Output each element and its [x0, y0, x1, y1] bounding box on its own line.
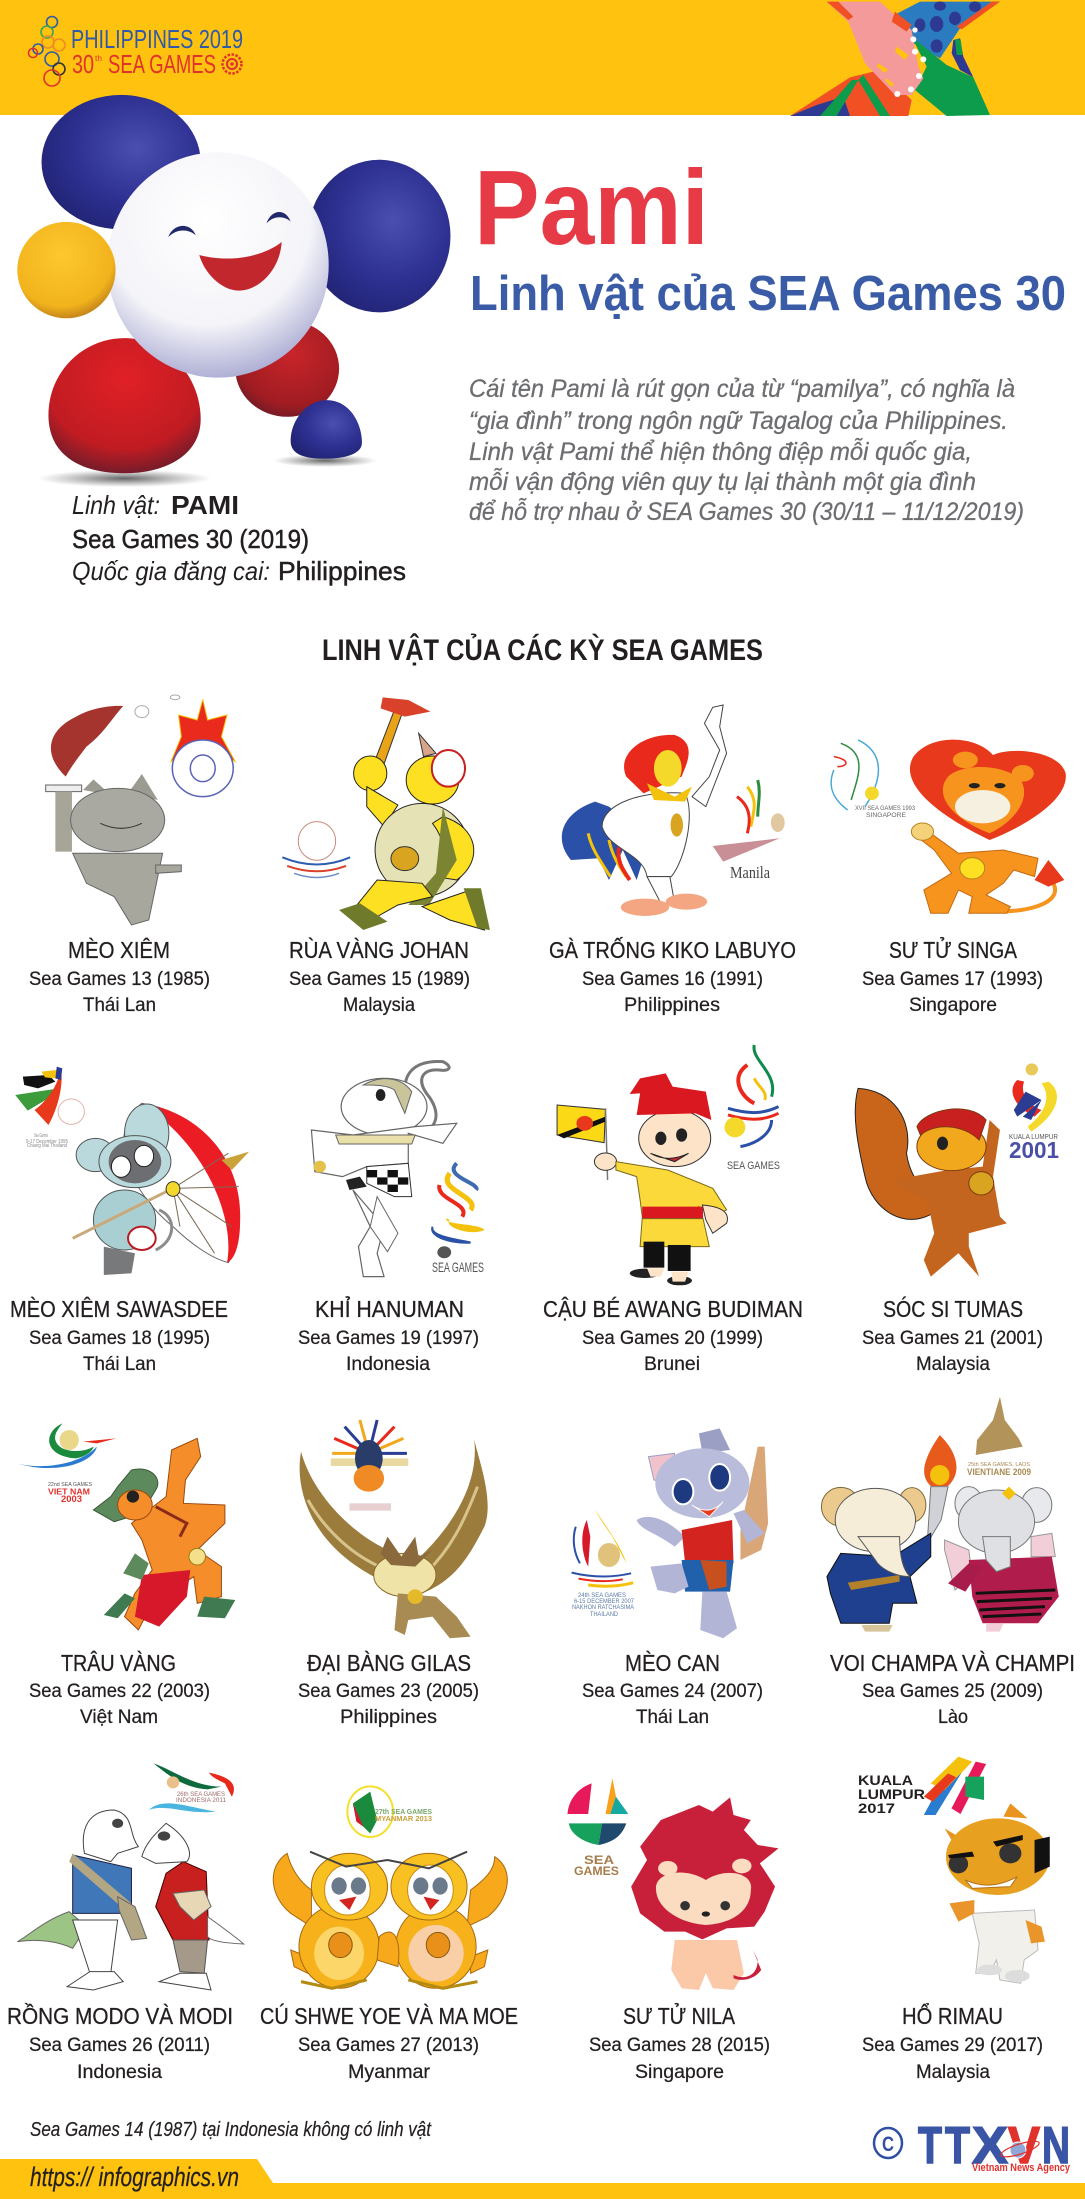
- panel: Voi Champa và Champi: [821, 1397, 1075, 1728]
- host country: Thái Lan: [636, 1706, 709, 1728]
- illustration: two elephants with torch: [821, 1397, 1059, 1632]
- edition: Sea Games 20 (1999): [582, 1328, 763, 1349]
- Pami caption: Linh vật:: [72, 490, 160, 520]
- wordmark: T: [945, 2117, 970, 2175]
- logo text: VIENTIANE 2009: [967, 1467, 1031, 1478]
- panel: Sư tử Nila: [567, 1777, 779, 2083]
- illustration: golden buffalo: [17, 1423, 235, 1630]
- panel: Trâu vàng: [17, 1423, 235, 1728]
- logo text: 25th SEA GAMES, LAOS: [968, 1462, 1030, 1468]
- intro paragraph: Linh vật Pami thể hiện thông điệp mỗi quốc gia,: [469, 437, 972, 466]
- illustration: two owls: [273, 1786, 507, 1988]
- logo text: Kuala Lumpur 2017: 2017: [858, 1800, 895, 1816]
- host country: Brunei: [644, 1353, 700, 1375]
- logo text: [572, 1592, 635, 1618]
- icon: flower emblem: [222, 54, 242, 74]
- logo text: SEA GAMES: [432, 1259, 484, 1275]
- host country: Philippines: [624, 994, 720, 1016]
- illustration: monkey line drawing: [311, 1062, 484, 1277]
- name: RÙA VÀNG JOHAN: [289, 937, 469, 963]
- logo text: 6-15 DECEMBER 2007: [574, 1598, 634, 1605]
- right blue ball: [308, 160, 450, 312]
- logo text: [574, 1853, 619, 1878]
- edition: Sea Games 29 (2017): [862, 2035, 1043, 2056]
- name: SƯ TỬ NILA: [623, 2001, 736, 2029]
- small blue foot: [291, 400, 362, 459]
- logo text line 2: [72, 49, 216, 79]
- logo text line 2: 30: [72, 49, 94, 79]
- host country: Malaysia: [916, 1353, 990, 1375]
- edition: Sea Games 17 (1993): [862, 969, 1043, 990]
- edition: Sea Games 25 (2009): [862, 1681, 1043, 1702]
- logo text: [176, 1791, 226, 1804]
- illustration: cat with torch: [46, 695, 235, 925]
- panel: Cậu bé Awang Budiman: [543, 1045, 803, 1375]
- host country: Việt Nam: [80, 1706, 158, 1728]
- edition: Sea Games 22 (2003): [29, 1681, 210, 1702]
- logo text: [375, 1807, 432, 1823]
- illustration: red maned lion: [567, 1777, 779, 1990]
- top-left blue ball: [42, 95, 201, 229]
- logo text: XVII SEA GAMES 1993: [855, 805, 915, 812]
- name: RỒNG MODO VÀ MODI: [7, 2002, 233, 2029]
- host country: Malaysia: [343, 994, 415, 1016]
- logo text: Chiang Mai Thailand: [27, 1143, 67, 1149]
- name: MÈO XIÊM SAWASDEE: [10, 1296, 228, 1322]
- ground shadows: [38, 470, 211, 487]
- panel: Cú Shwe Yoe và Ma Moe: [260, 1786, 518, 2083]
- logo text: Kuala Lumpur 2017: [858, 1772, 925, 1816]
- panel: Rồng Modo và Modi: [7, 1763, 244, 2083]
- name: CÚ SHWE YOE VÀ MA MOE: [260, 2003, 518, 2029]
- host country: Thái Lan: [83, 994, 156, 1016]
- footnote: Sea Games 14 (1987) tại Indonesia không có linh vật: [30, 2119, 432, 2141]
- logo text: INDONESIA 2011: [176, 1797, 226, 1804]
- icon: copyright: [874, 2128, 902, 2158]
- panel: Mèo Xiêm Sawasdee: [10, 1067, 249, 1375]
- Pami caption: Philippines: [278, 556, 406, 586]
- logo text line 2: th: [95, 54, 102, 63]
- panel: Hổ Rimau: [858, 1757, 1050, 2083]
- edition: Sea Games 15 (1989): [289, 969, 470, 990]
- logo: Philippines 2019 SEA Games: [28, 16, 243, 86]
- panel: Mèo Xiêm: [29, 695, 235, 1016]
- logo text: GAMES: [574, 1864, 619, 1878]
- wordmark: X: [972, 2117, 1008, 2175]
- heading: mascots of each SEA Games: LINH VẬT CỦA CÁC KỲ SEA GAMES: [322, 633, 763, 667]
- logo text: 24th SEA GAMES: [578, 1592, 627, 1599]
- left red leg: [48, 338, 201, 473]
- footer url: https:// infographics.vn: [30, 2162, 239, 2192]
- illustration: rooster: [562, 705, 785, 916]
- host country: Singapore: [635, 2061, 724, 2083]
- illustration: boy with flag: [557, 1045, 779, 1285]
- wordmark: N: [1042, 2117, 1070, 2175]
- logo text line 2: SEA GAMES: [108, 49, 216, 79]
- mouth: [199, 242, 282, 291]
- illustration: eagle: [300, 1420, 488, 1638]
- logo text: Sea Games: [34, 1133, 48, 1139]
- logo text: 26th SEA GAMES: [177, 1791, 226, 1798]
- logo text: [26, 1133, 68, 1149]
- logo text: 2003: [61, 1494, 82, 1504]
- Pami caption: PAMI: [171, 490, 239, 520]
- edition: Sea Games 16 (1991): [582, 969, 763, 990]
- host country: Philippines: [340, 1706, 437, 1728]
- name: MÈO XIÊM: [68, 937, 170, 963]
- name: SƯ TỬ SINGA: [889, 935, 1018, 963]
- wordmark: V: [1008, 2117, 1040, 2175]
- logo text: [48, 1482, 93, 1504]
- host country: Indonesia: [346, 1353, 430, 1375]
- logo text: KUALA LUMPUR: [1009, 1134, 1058, 1141]
- intro paragraph: mỗi vận động viên quy tụ lại thành một gia đình: [469, 467, 976, 496]
- logo text: Kuala Lumpur 2017: KUALA: [858, 1772, 913, 1788]
- panel: Đại bàng Gilas: [298, 1420, 488, 1728]
- name: SÓC SI TUMAS: [883, 1296, 1023, 1322]
- logo text: [855, 805, 915, 819]
- host country: Lào: [938, 1706, 968, 1728]
- name: HỔ RIMAU: [902, 2002, 1003, 2029]
- host country: Singapore: [909, 994, 997, 1016]
- yellow ball: [17, 222, 116, 318]
- logo text: THAILAND: [590, 1611, 618, 1618]
- logo text: VIET NAM: [48, 1488, 90, 1496]
- edition: Sea Games 24 (2007): [582, 1681, 763, 1702]
- host country: Malaysia: [916, 2061, 990, 2083]
- icon: linked rings: [28, 16, 65, 86]
- Pami caption: Quốc gia đăng cai:: [72, 556, 270, 586]
- wordmark: T: [918, 2117, 942, 2175]
- panel: Gà trống Kiko Labuyo: [549, 705, 796, 1016]
- name: CẬU BÉ AWANG BUDIMAN: [543, 1296, 803, 1322]
- edition: Sea Games 23 (2005): [298, 1681, 479, 1702]
- intro paragraph: để hỗ trợ nhau ở SEA Games 30 (30/11 – 11/12/2019): [469, 497, 1024, 526]
- panel: Sư tử Singa: [831, 740, 1066, 1016]
- host country: Indonesia: [77, 2061, 162, 2083]
- name: GÀ TRỐNG KIKO LABUYO: [549, 936, 796, 963]
- illustration: cat with umbrella: [15, 1067, 249, 1275]
- wordmark: [918, 2117, 1070, 2175]
- edition: Sea Games 13 (1985): [29, 969, 210, 990]
- edition: Sea Games 26 (2011): [29, 2035, 210, 2056]
- logo text line 1: PHILIPPINES 2019: [71, 24, 243, 54]
- illustration: two komodo dragons: [17, 1763, 244, 1990]
- illustration: tiger: [924, 1757, 1050, 1983]
- intro paragraph: Cái tên Pami là rút gọn của từ “pamilya”, có nghĩa là: [469, 375, 1015, 403]
- logo text: 9-17 December 1995: [26, 1139, 68, 1145]
- white body: [107, 152, 329, 378]
- illustration: grey cat: [572, 1428, 768, 1638]
- logo text: Kuala Lumpur 2017: LUMPUR: [858, 1786, 925, 1802]
- logo text: SEA: [584, 1853, 614, 1867]
- edition: Sea Games 19 (1997): [298, 1328, 479, 1349]
- icon: copyright: C: [882, 2133, 894, 2156]
- intro paragraph: “gia đình” trong ngôn ngữ Tagalog của Philippines.: [469, 407, 1008, 435]
- illustration: yellow turtle: [282, 697, 490, 930]
- decorative hands illustration: [790, 1, 1000, 116]
- host country: Myanmar: [348, 2061, 430, 2083]
- logo text: SEA GAMES: [727, 1160, 780, 1172]
- panel: Rùa vàng Johan: [282, 697, 490, 1016]
- footer band: [0, 2159, 1085, 2199]
- edition: Sea Games 18 (1995): [29, 1328, 210, 1349]
- logo text: NAKHON RATCHASIMA: [572, 1604, 635, 1611]
- right red leg: [235, 320, 339, 417]
- agency logo: TTXVN: [874, 2117, 1071, 2175]
- logo text: Manila: Manila: [730, 863, 770, 882]
- illustration: Pami mascot: [17, 95, 450, 487]
- logo text: [967, 1462, 1031, 1478]
- edition: Sea Games 21 (2001): [862, 1328, 1043, 1349]
- name: ĐẠI BÀNG GILAS: [307, 1650, 471, 1676]
- illustration: squirrel: [855, 1063, 1057, 1277]
- logo text: SINGAPORE: [866, 812, 907, 819]
- icon: globe: [999, 2138, 1041, 2160]
- edition: Sea Games 27 (2013): [298, 2035, 479, 2056]
- panel: Mèo Can: [572, 1428, 768, 1728]
- logo text: 22nd SEA GAMES: [48, 1482, 93, 1488]
- edition: Sea Games 28 (2015): [589, 2035, 770, 2056]
- host country: Thái Lan: [83, 1353, 156, 1375]
- title: Pami: Pami: [474, 149, 709, 267]
- eyes: [168, 226, 196, 237]
- intro paragraph: [469, 375, 1024, 526]
- Pami caption: [72, 490, 406, 586]
- logo text: 2001: [1009, 1137, 1059, 1163]
- name: MÈO CAN: [625, 1650, 720, 1676]
- panel: Khỉ Hanuman: [298, 1062, 484, 1375]
- illustration: heart-maned lion: [831, 740, 1066, 913]
- logo text: MYANMAR 2013: [375, 1814, 432, 1823]
- Pami caption: Sea Games 30 (2019): [72, 524, 309, 554]
- logo text: 27th SEA GAMES: [375, 1807, 432, 1816]
- panel: Sóc Si Tumas: [855, 1063, 1059, 1375]
- header band: [0, 0, 1085, 115]
- name: KHỈ HANUMAN: [315, 1294, 464, 1322]
- name: TRÂU VÀNG: [61, 1650, 176, 1676]
